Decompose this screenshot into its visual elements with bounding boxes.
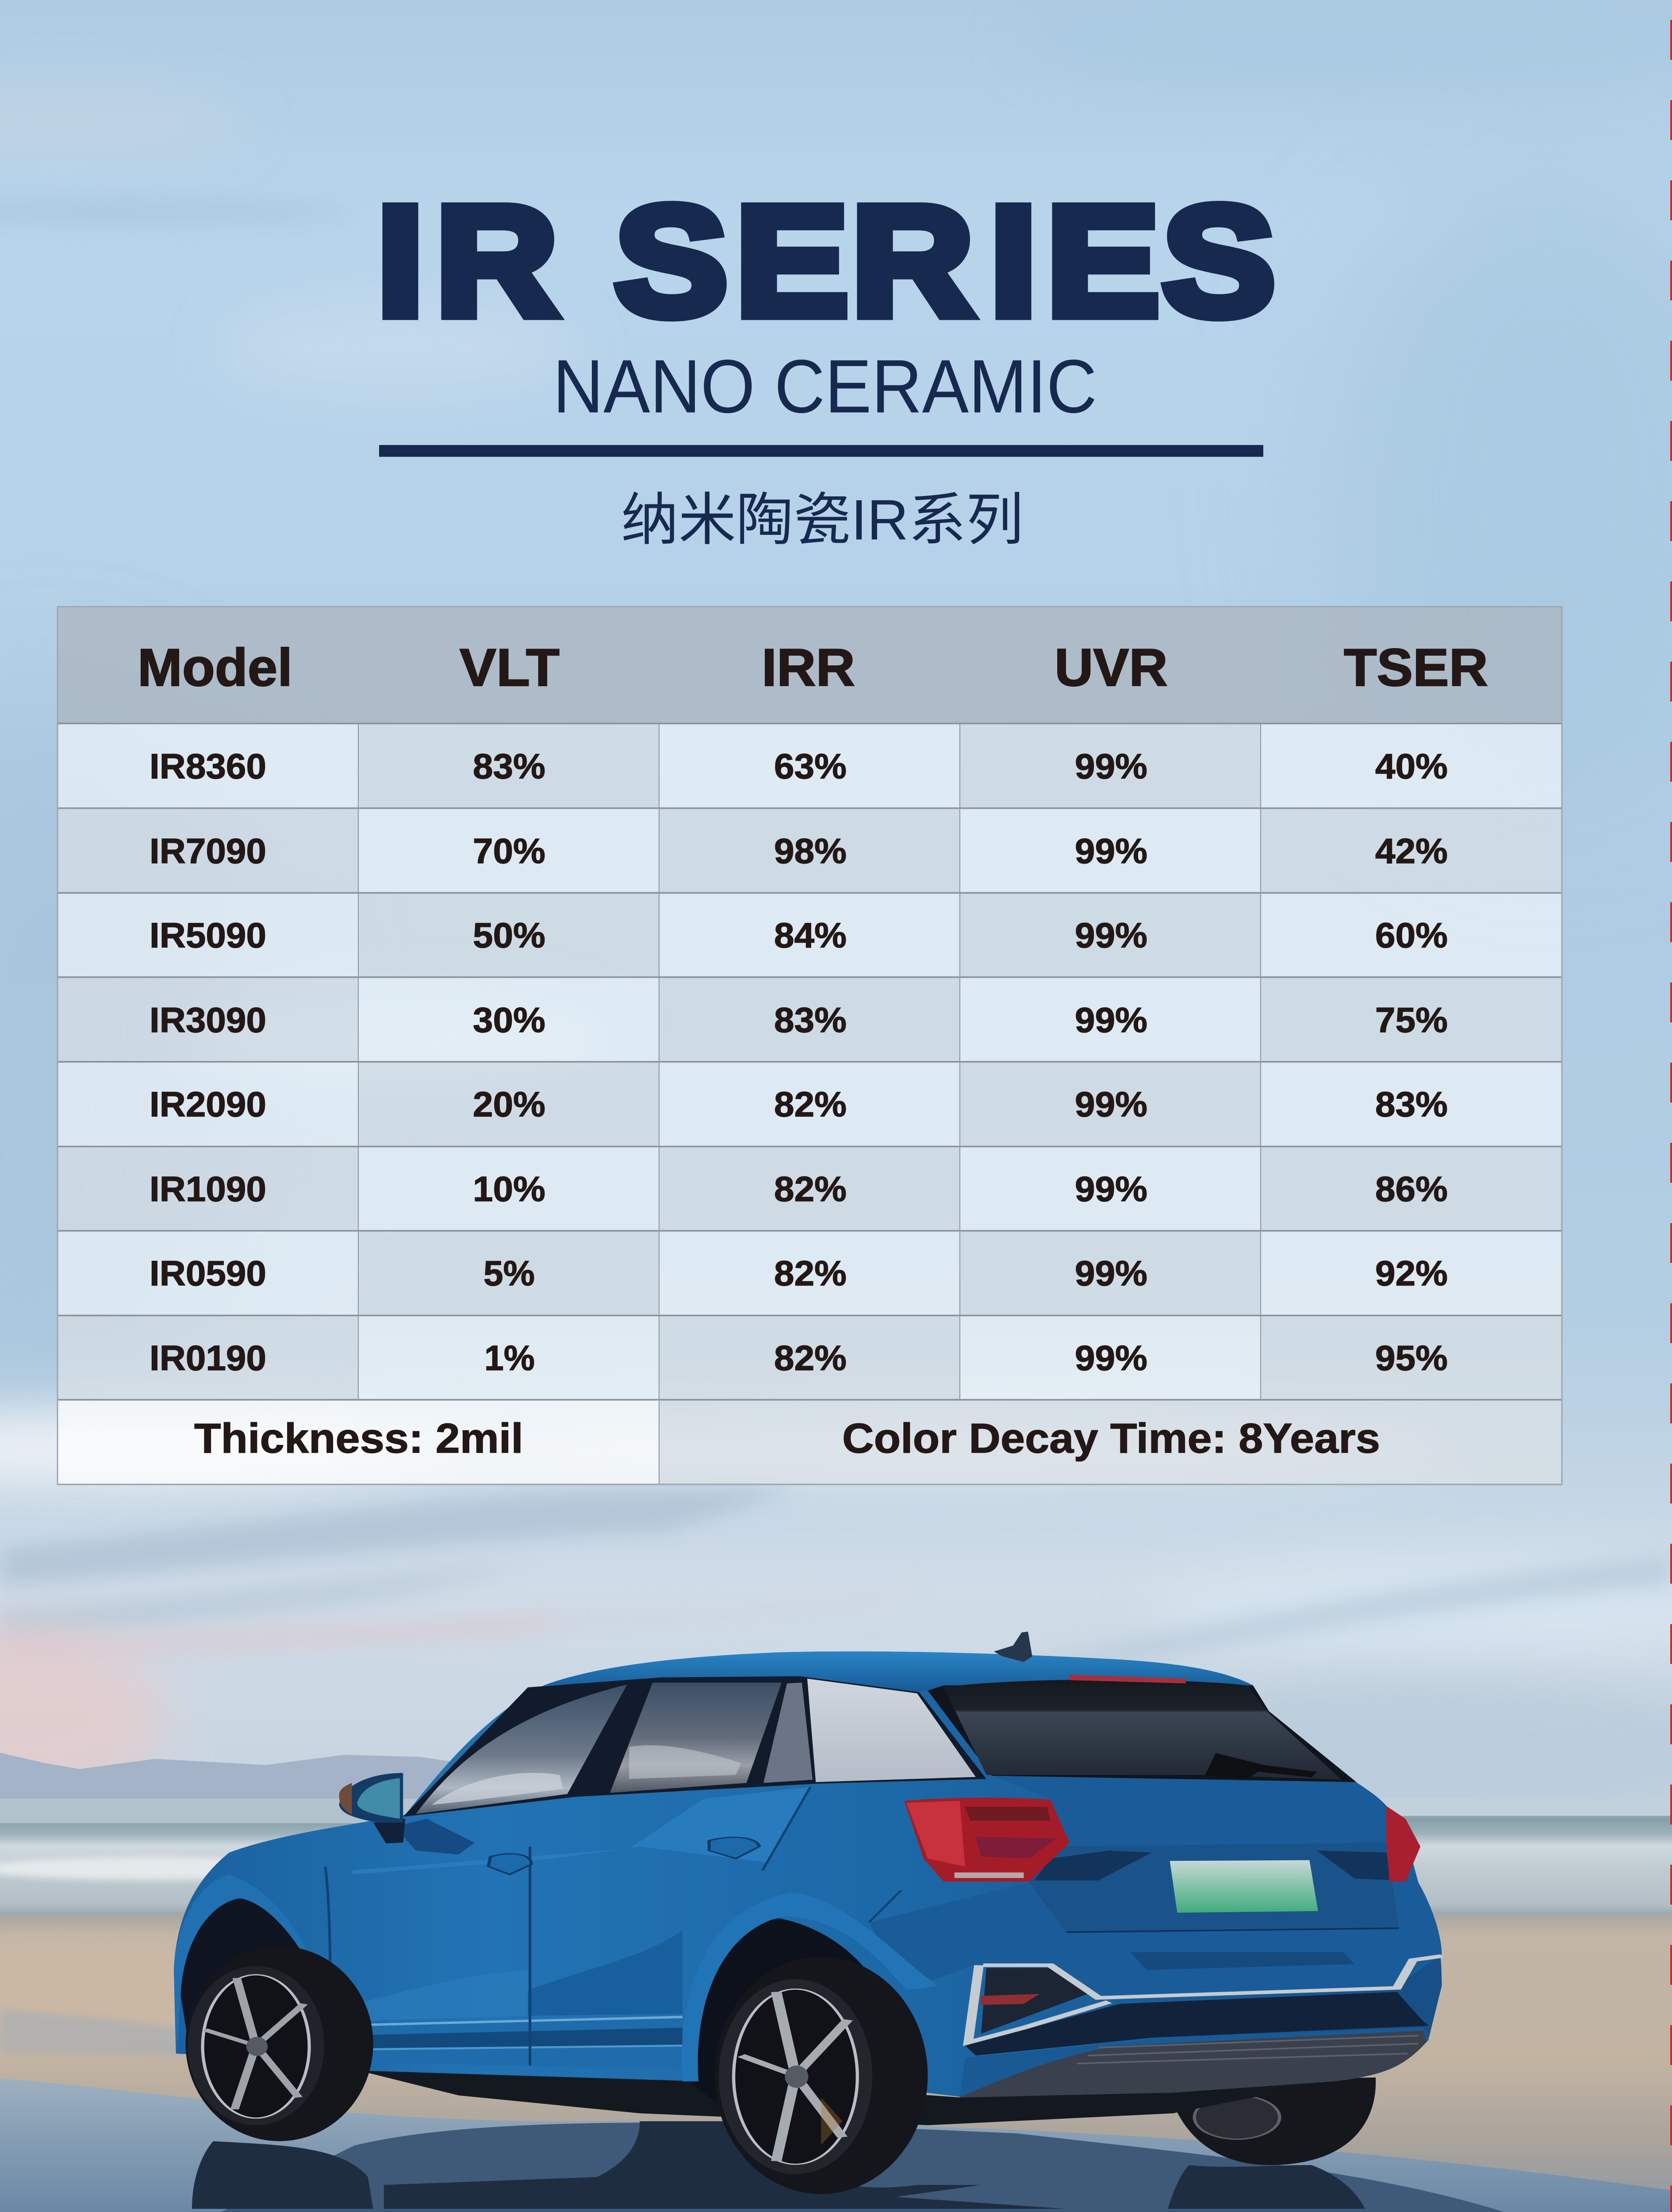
row IR1090 <box>150 1169 1448 1209</box>
row IR7090 <box>150 831 1448 871</box>
row IR2090: 99% <box>1075 1084 1147 1124</box>
row IR0190: IR0190 <box>150 1338 266 1378</box>
row IR0190: 1% <box>484 1338 535 1378</box>
right tail light <box>1386 1806 1420 1882</box>
rear wiper <box>1205 1753 1317 1778</box>
front door window <box>416 1685 627 1814</box>
front wheel arch <box>179 1894 330 2113</box>
row IR8360: 83% <box>473 746 545 786</box>
left tail light <box>904 1797 1070 1882</box>
front window cloud reflection <box>432 1773 563 1805</box>
row IR0590 <box>150 1253 1448 1293</box>
rear panel shading <box>869 1775 1442 1998</box>
row IR8360: 99% <box>1075 746 1147 786</box>
rear window frame <box>928 1686 1357 1782</box>
row IR3090: 83% <box>774 1000 847 1040</box>
row IR1090: 99% <box>1075 1169 1147 1209</box>
side body highlights <box>325 1787 901 2070</box>
row IR5090 <box>150 915 1448 955</box>
specification table <box>58 607 1562 1484</box>
table header row: VLT <box>460 638 560 697</box>
row IR2090: IR2090 <box>150 1084 266 1124</box>
narrow rear window <box>763 1682 813 1783</box>
roof highlight <box>544 1651 1253 1692</box>
row IR8360: IR8360 <box>150 746 266 786</box>
rear bumper <box>960 1956 1442 2097</box>
row IR0590: 92% <box>1375 1253 1448 1293</box>
row IR7090: 42% <box>1375 831 1448 871</box>
car body shell <box>174 1651 1442 2097</box>
side window frame <box>403 1676 986 1817</box>
footer row: thickness and color decay time: Color Decay Time: 8Years <box>842 1414 1380 1462</box>
row IR0590: 99% <box>1075 1253 1147 1293</box>
row IR7090: IR7090 <box>150 831 266 871</box>
table header row: UVR <box>1055 638 1168 697</box>
row IR3090: 75% <box>1375 1000 1448 1040</box>
blue car on the beach <box>174 1632 1442 2209</box>
row IR7090: 99% <box>1075 831 1147 871</box>
row IR5090: 84% <box>774 915 847 955</box>
footer row: thickness and color decay time: Thickness: 2mil <box>194 1414 523 1462</box>
rear windscreen <box>944 1680 1342 1780</box>
rear wheel arch <box>687 1918 906 2117</box>
underbody <box>330 2063 1344 2125</box>
row IR3090 <box>150 1000 1448 1040</box>
rear window cloud reflection <box>629 1745 741 1779</box>
Chinese subtitle: 纳米陶瓷IR系列 <box>621 488 1024 552</box>
row IR5090: 99% <box>1075 915 1147 955</box>
row IR8360: 40% <box>1375 746 1448 786</box>
front wheel <box>185 1946 373 2141</box>
row IR1090: 86% <box>1375 1169 1448 1209</box>
car reflections <box>192 2121 1365 2209</box>
license plate <box>1170 1860 1318 1912</box>
row IR3090: IR3090 <box>150 1000 266 1040</box>
table header row: TSER <box>1344 638 1488 697</box>
row IR0190 <box>150 1338 1448 1378</box>
quarter window <box>807 1678 976 1782</box>
row IR3090: 99% <box>1075 1000 1147 1040</box>
brake light <box>1070 1674 1186 1683</box>
row IR0590: 82% <box>774 1253 847 1293</box>
row IR2090: 82% <box>774 1084 847 1124</box>
row IR0590: 5% <box>483 1253 535 1293</box>
side mirror <box>339 1773 405 1843</box>
table header row: IRR <box>762 638 855 697</box>
row IR2090: 20% <box>473 1084 545 1124</box>
row IR7090: 98% <box>774 831 847 871</box>
row IR0190: 82% <box>774 1338 847 1378</box>
row IR1090: IR1090 <box>150 1169 266 1209</box>
title: IR SERIES: IR SERIES <box>377 174 1275 348</box>
row IR1090: 82% <box>774 1169 847 1209</box>
rear wheel <box>714 1957 928 2194</box>
red dashed edge line <box>1670 0 1672 2212</box>
row IR0190: 95% <box>1375 1338 1448 1378</box>
row IR2090 <box>150 1084 1448 1124</box>
row IR5090: 60% <box>1375 915 1448 955</box>
row IR5090: 50% <box>473 915 545 955</box>
table header row: Model <box>138 638 292 697</box>
row IR1090: 10% <box>473 1169 545 1209</box>
row IR7090: 70% <box>473 831 545 871</box>
row IR8360: 63% <box>774 746 847 786</box>
row IR2090: 83% <box>1375 1084 1448 1124</box>
rear door window <box>610 1682 782 1793</box>
row IR5090: IR5090 <box>150 915 266 955</box>
table cell shading <box>58 723 1562 1484</box>
footer row: thickness and color decay time <box>194 1414 1380 1462</box>
shark fin antenna <box>994 1632 1032 1662</box>
far rear wheel <box>1168 2078 1376 2165</box>
row IR8360 <box>150 746 1448 786</box>
divider bar <box>379 445 1263 457</box>
row IR0190: 99% <box>1075 1338 1147 1378</box>
table header row <box>58 607 1562 723</box>
row IR3090: 30% <box>473 1000 545 1040</box>
subtitle: NANO CERAMIC: NANO CERAMIC <box>553 344 1097 429</box>
row IR0590: IR0590 <box>150 1253 266 1293</box>
